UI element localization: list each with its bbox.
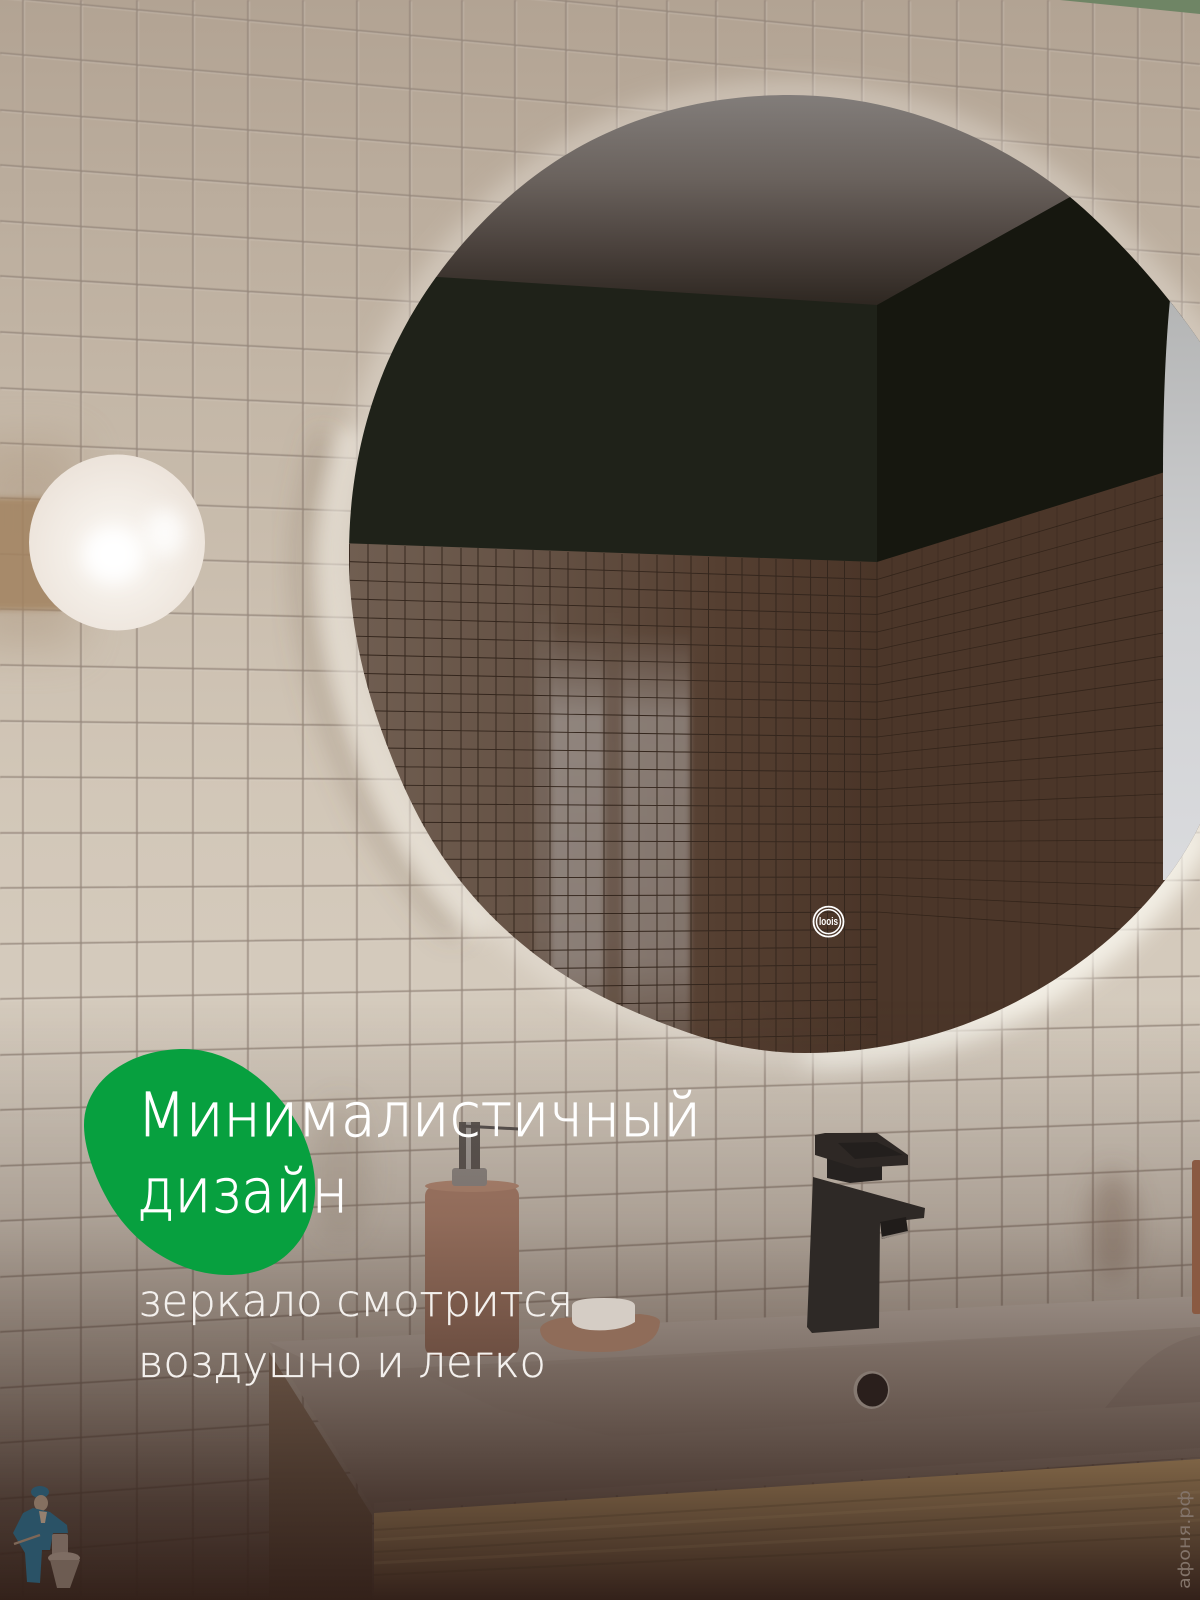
dark gradient overlay bbox=[0, 1000, 1200, 1600]
soap dish with soap bbox=[540, 1298, 660, 1352]
title: дизайн bbox=[137, 1156, 348, 1227]
green accent blob bbox=[84, 1049, 315, 1275]
green ceiling strip bbox=[1060, 0, 1200, 14]
watermark: афоня.рф bbox=[1175, 1490, 1195, 1589]
plumber logo bbox=[13, 1486, 80, 1588]
reflection: light highlights on tile bbox=[534, 600, 690, 1040]
vanity side panel bbox=[269, 1352, 372, 1600]
subtitle: зеркало смотрится bbox=[138, 1276, 573, 1327]
reflection: dark left wall bbox=[340, 275, 877, 570]
washbasin bbox=[269, 1296, 1200, 1511]
mirror backlight glow bbox=[303, 95, 1200, 1053]
soft shadows on wall bbox=[310, 1100, 1137, 1280]
soap dispenser bbox=[425, 1122, 519, 1356]
reflection: mosaic tile left wall bbox=[340, 543, 877, 1060]
reflection: ceiling bbox=[408, 95, 1184, 320]
reflection: bright door on right bbox=[1163, 300, 1200, 880]
wooden vanity front bbox=[374, 1459, 1200, 1600]
touch sensor logo on mirror bbox=[814, 907, 844, 937]
touch sensor logo on mirror: loois bbox=[819, 916, 838, 928]
subtitle bbox=[138, 1276, 573, 1388]
wall lamp with shadow bbox=[0, 440, 205, 650]
reflection: mosaic tile right wall bbox=[877, 461, 1200, 1060]
reflection: mosaic grout right wall bbox=[877, 495, 1163, 932]
reflection: dark right wall bbox=[877, 197, 1200, 570]
overflow drain bbox=[854, 1371, 890, 1409]
title bbox=[137, 1080, 701, 1227]
black faucet bbox=[807, 1133, 925, 1333]
title: Минималистичный bbox=[137, 1080, 701, 1151]
subtitle: воздушно и легко bbox=[138, 1337, 546, 1388]
reflection: mosaic grout left wall bbox=[340, 544, 877, 1064]
right-edge bottle bbox=[1192, 1160, 1200, 1314]
round backlit mirror bbox=[340, 90, 1200, 1064]
